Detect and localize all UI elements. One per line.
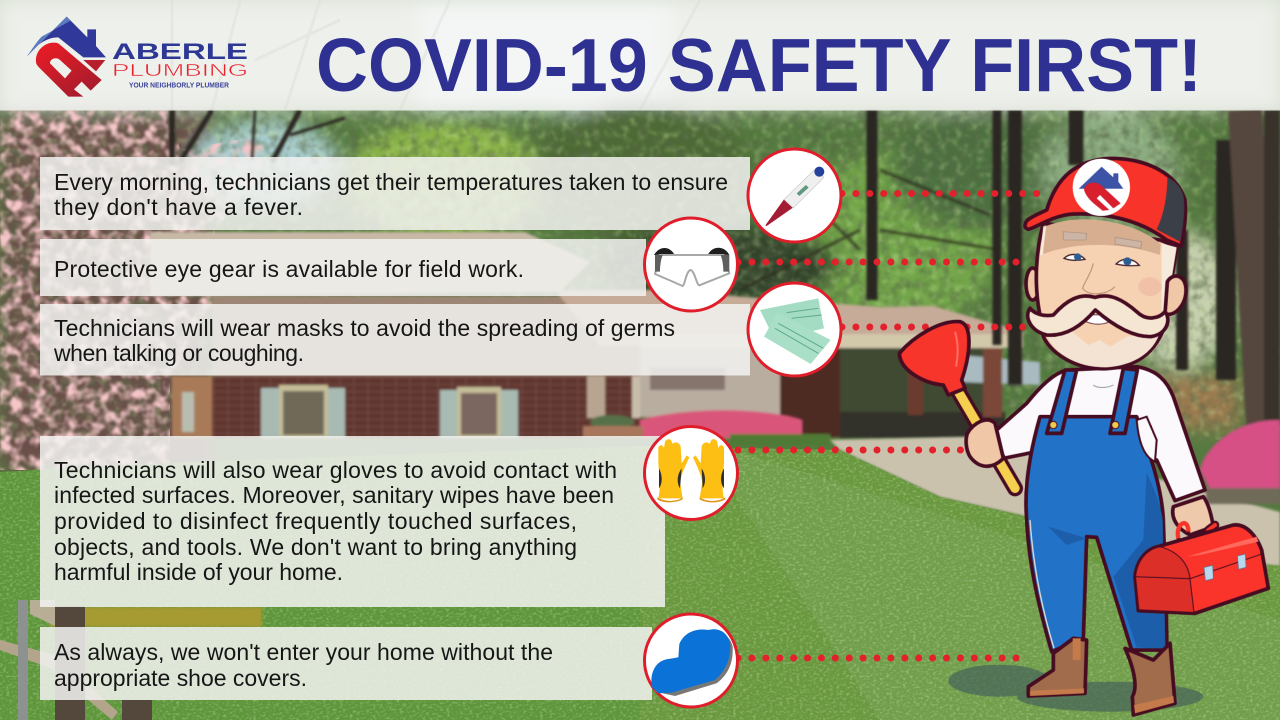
lawn — [0, 440, 1280, 720]
panel: shoe covers — [40, 627, 652, 700]
red toolbox — [1135, 523, 1268, 613]
trunks and branches — [172, 110, 1272, 425]
panel: shoe covers: appropriate shoe covers. — [54, 665, 307, 691]
boots — [1028, 638, 1175, 715]
panel: temperature check: Every morning, technicians get their temperatures taken to ensure — [54, 169, 728, 195]
faint branches behind header — [172, 0, 700, 110]
panel: gloves and wipes: Technicians will also wear gloves to avoid contact with — [54, 457, 617, 483]
panel: gloves and wipes: provided to disinfect frequently touched surfaces, — [54, 508, 577, 534]
icon: thermometer — [748, 149, 841, 242]
shirt and arms — [997, 367, 1205, 501]
panel: gloves and wipes — [40, 436, 665, 607]
panel: temperature check — [40, 157, 750, 230]
icon: yellow gloves — [644, 426, 738, 520]
logo: Aberle Plumbing: ABERLE — [112, 39, 248, 64]
panel: eye gear — [40, 239, 646, 296]
panel: gloves and wipes: infected surfaces. Moreover, sanitary wipes have been — [54, 482, 614, 508]
icon: blue shoe covers — [644, 614, 738, 707]
yellow shrub — [50, 607, 262, 627]
plumber mascot — [899, 158, 1268, 715]
right hand — [1173, 497, 1213, 535]
house — [150, 232, 1040, 446]
ground shadow — [948, 665, 1203, 712]
panel: masks: Technicians will wear masks to avoid the spreading of germs — [54, 315, 675, 341]
panel: gloves and wipes: objects, and tools. We don't want to bring anything — [54, 534, 577, 560]
panel: masks — [40, 304, 750, 376]
title: COVID-19 SAFETY FIRST! — [316, 23, 1202, 107]
icon: safety goggles — [644, 218, 738, 311]
panel: gloves and wipes: harmful inside of your home. — [54, 559, 343, 585]
head — [1026, 219, 1186, 369]
logo: Aberle Plumbing: PLUMBING — [112, 60, 248, 80]
pink azalea bushes — [1200, 420, 1280, 504]
red cap with logo — [1025, 158, 1185, 246]
panel: shoe covers: As always, we won't enter your home without the — [54, 639, 553, 665]
dotted connectors — [738, 194, 1037, 658]
panel: masks: when talking or coughing. — [53, 340, 304, 366]
icon: face masks — [748, 283, 841, 376]
header band — [0, 0, 1280, 110]
left hand — [966, 420, 1003, 466]
driveway — [830, 436, 1280, 566]
logo: Aberle Plumbing — [27, 17, 248, 97]
overalls — [1026, 368, 1167, 652]
panel: temperature check: they don't have a fever. — [54, 194, 303, 220]
panel: eye gear: Protective eye gear is available for field work. — [54, 256, 524, 282]
wooden fence — [0, 600, 152, 720]
logo: Aberle Plumbing: YOUR NEIGHBORLY PLUMBER — [129, 80, 230, 90]
plunger — [899, 322, 1015, 488]
